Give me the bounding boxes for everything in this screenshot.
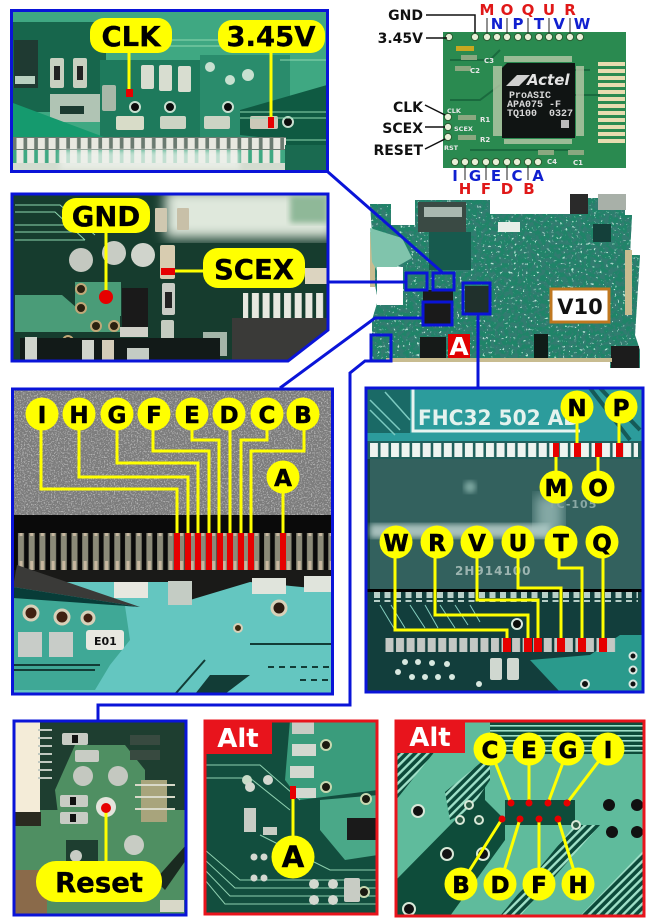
3.45V callout xyxy=(218,20,325,128)
letter markers: B xyxy=(294,403,312,429)
chip components: C2 xyxy=(470,67,480,75)
chip leader lines xyxy=(425,15,570,180)
chip components: C4 xyxy=(547,158,557,166)
A marker: A xyxy=(282,840,305,874)
letter markers: G xyxy=(108,403,126,429)
3.45V callout: 3.45V xyxy=(226,21,316,53)
letter markers: C xyxy=(482,738,498,764)
chip components xyxy=(444,46,584,167)
label: V10 xyxy=(551,289,609,322)
panel: Alt position for A xyxy=(204,720,378,915)
chip package: ProASIC xyxy=(509,91,551,102)
CLK callout xyxy=(90,18,172,97)
main board overview xyxy=(370,194,640,368)
label: V10: V10 xyxy=(557,295,603,319)
letter markers: N xyxy=(567,396,587,422)
letter markers: H xyxy=(69,403,89,429)
chip labels: top pins: U xyxy=(543,1,555,19)
chip components: CLK xyxy=(447,107,462,115)
letter markers: T xyxy=(553,531,569,557)
Alt tag: Alt xyxy=(409,723,451,753)
panel: pins A to I close-up xyxy=(12,388,334,700)
wires M to W xyxy=(395,407,619,638)
chip components: RST xyxy=(444,144,459,152)
chip labels: bottom pins: E xyxy=(491,167,501,185)
chip components: C1 xyxy=(573,159,583,167)
letter markers: O xyxy=(588,476,608,502)
panel: pins M to W close-up: 2H914100 xyxy=(455,564,532,578)
chip labels: bottom pins: F xyxy=(481,180,491,198)
red pins xyxy=(174,533,286,570)
chip labels: bottom pins: D xyxy=(501,180,513,198)
panel: Alt position for B to I xyxy=(395,720,645,917)
letter markers: V xyxy=(468,531,486,557)
chip components: C3 xyxy=(484,57,494,65)
letter markers: C xyxy=(259,403,275,429)
letter markers: Q xyxy=(592,531,612,557)
letter markers: I xyxy=(38,403,46,429)
letter markers: E xyxy=(521,738,537,764)
chip labels: signals xyxy=(373,8,424,159)
letter markers: I xyxy=(604,738,612,764)
letter markers: A xyxy=(274,466,292,492)
leader lines xyxy=(461,749,608,884)
chip labels: top pins: M xyxy=(480,1,494,19)
chip labels: bottom pins: C xyxy=(511,167,523,185)
red dots xyxy=(498,800,570,822)
GND callout xyxy=(62,198,150,304)
chip labels: bottom pins: A xyxy=(532,167,544,185)
modchip diagram xyxy=(373,1,626,198)
locator boxes xyxy=(371,273,490,361)
pin rows of the chip xyxy=(493,56,584,144)
chip labels: top pins: V xyxy=(553,15,565,33)
chip labels: top pins: P xyxy=(512,15,524,33)
chip labels: bottom pins: H xyxy=(459,180,471,198)
chip labels: signals: 3.45V xyxy=(378,31,423,47)
letter markers: F xyxy=(146,403,162,429)
panel: GND and SCEX close-up xyxy=(11,190,335,361)
finger pads xyxy=(598,62,625,143)
chip labels: top pins xyxy=(480,1,591,33)
CLK callout: CLK xyxy=(101,21,162,53)
letter markers: G xyxy=(559,738,577,764)
letter markers: F xyxy=(531,873,547,899)
letter markers xyxy=(26,398,320,494)
chip labels: top pins: R xyxy=(564,1,576,19)
panel: pins M to W close-up: FHC32 502 AD xyxy=(418,406,580,430)
SCEX callout: SCEX xyxy=(214,254,294,286)
letter markers: W xyxy=(383,531,409,557)
chip labels: signals: GND xyxy=(388,8,423,24)
Reset callout: Reset xyxy=(55,867,143,899)
label: A: A xyxy=(449,332,469,361)
chip labels: signals: SCEX xyxy=(382,121,423,137)
wires I to A xyxy=(41,414,304,533)
chip labels: bottom pins: G xyxy=(469,167,481,185)
letter markers: D xyxy=(219,403,239,429)
panel: pins M to W close-up xyxy=(365,388,644,693)
chip pads xyxy=(444,33,584,166)
panel: pins A to I close-up: E01 xyxy=(94,635,117,648)
chip package xyxy=(502,63,575,138)
chip labels: bottom pins: I xyxy=(452,167,458,185)
chip labels: signals: CLK xyxy=(393,100,424,116)
Alt tag xyxy=(395,720,465,753)
letter markers xyxy=(444,732,624,900)
chip labels: top pins: O xyxy=(501,1,513,19)
chip labels: signals: RESET xyxy=(373,143,423,159)
chip package: Actel xyxy=(526,71,570,89)
Alt tag: Alt xyxy=(217,724,259,754)
chip labels: top pins: N xyxy=(491,15,503,33)
Alt tag xyxy=(204,720,272,754)
chip components: SCEX xyxy=(454,125,473,133)
panel: pins M to W close-up: TC-105 xyxy=(548,498,597,511)
connector lines from board to panels xyxy=(98,172,478,720)
GND callout: GND xyxy=(72,201,140,233)
chip package: TQ100 xyxy=(507,109,537,120)
SCEX callout xyxy=(161,248,305,288)
panel: Reset close-up xyxy=(13,720,186,915)
letter markers: P xyxy=(613,396,629,422)
chip labels: top pins: T xyxy=(534,15,545,33)
chip components: R1 xyxy=(480,116,490,124)
letter markers: R xyxy=(428,531,446,557)
red pads xyxy=(503,443,623,652)
letter markers: H xyxy=(568,873,588,899)
panel: CLK and 3.45V close-up xyxy=(11,10,328,172)
chip labels: bottom pins: B xyxy=(523,180,535,198)
chip labels: bottom pins xyxy=(452,167,544,198)
letter markers: B xyxy=(452,873,470,899)
Reset callout xyxy=(36,803,162,902)
A marker xyxy=(272,786,314,878)
chip components: R2 xyxy=(480,136,490,144)
letter markers: D xyxy=(490,873,510,899)
chip package: APA075 -F xyxy=(507,100,561,111)
chip labels: top pins: W xyxy=(574,15,591,33)
letter markers: E xyxy=(184,403,200,429)
letter markers: U xyxy=(509,531,527,557)
letter markers xyxy=(380,390,638,558)
chip package: 0327 xyxy=(549,109,573,120)
letter markers: M xyxy=(545,476,567,502)
chip labels: top pins: Q xyxy=(522,1,534,19)
